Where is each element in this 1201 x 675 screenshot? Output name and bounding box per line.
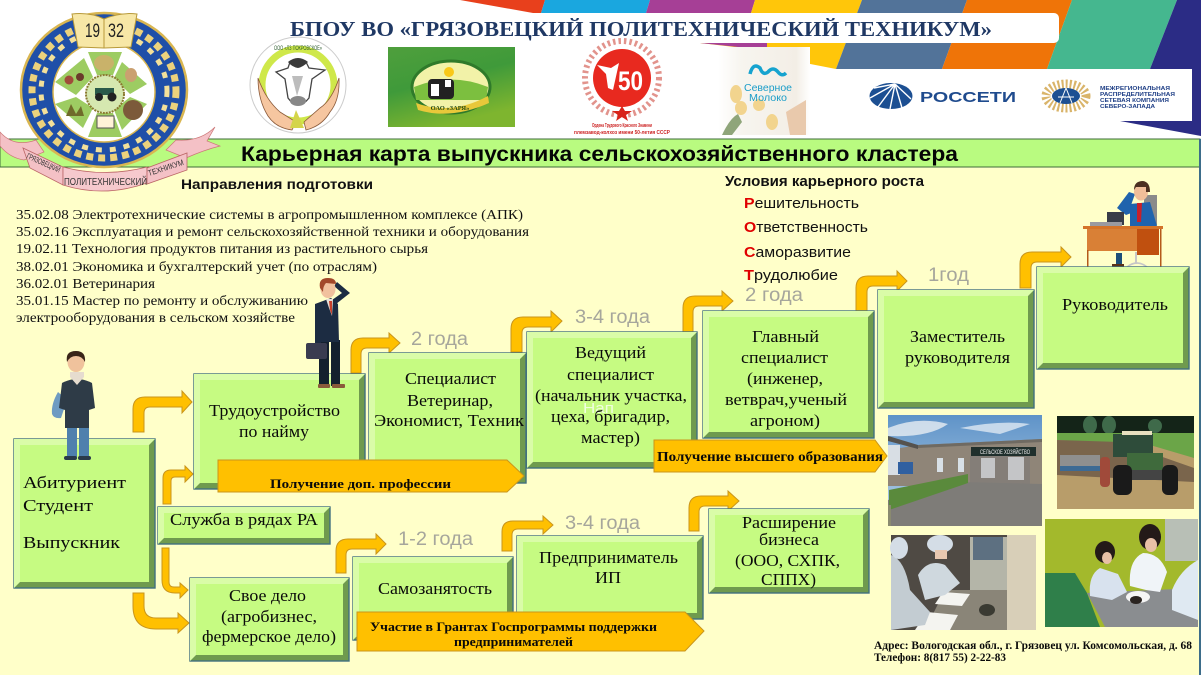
logo: Покровское cow: ООО «ЛЗ ПОКРОВСКОЕ»	[274, 46, 322, 52]
illustration: student	[52, 351, 95, 460]
text block: career growth conditions: Трудолюбие	[744, 268, 838, 284]
text block: training directions: 35.01.15 Мастер по ремонту и обслуживанию	[16, 293, 308, 308]
box: chief specialist: Главный	[752, 327, 819, 346]
logo: Северное Молоко: Молоко	[749, 92, 787, 104]
label: 3-4 years business: 3-4 года	[565, 513, 640, 534]
logo: college emblem: 19	[85, 21, 100, 42]
arrow: lead to chief specialist	[683, 291, 733, 332]
box: own business: (агробизнес,	[221, 607, 317, 626]
photo: college building	[888, 415, 1042, 526]
banner: higher education: Получение высшего образования	[657, 449, 883, 464]
arrow: self-employment to entrepreneur	[502, 516, 553, 551]
logo: МРСК Северо-Запада: СЕВЕРО-ЗАПАДА	[1100, 104, 1156, 110]
text block: training directions: Направления подготовки	[181, 176, 373, 192]
box: abiturient: Студент	[23, 496, 94, 515]
heading: college name: БПОУ ВО «ГРЯЗОВЕЦКИЙ ПОЛИТЕХНИЧЕСКИЙ ТЕХНИКУМ»	[290, 17, 992, 41]
arrow: army to employment	[163, 466, 193, 504]
photo: college building: СЕЛЬСКОЕ ХОЗЯЙСТВО	[980, 448, 1030, 456]
box: self-employment: Самозанятость	[378, 579, 492, 598]
box: chief specialist	[703, 311, 874, 438]
box: deputy head: Заместитель	[910, 327, 1005, 346]
box: own business: Свое дело	[229, 586, 306, 605]
arrow: entrepreneur to business expansion	[689, 491, 739, 531]
box: lead specialist: Ведущий	[575, 343, 646, 362]
logo: college emblem: ПОЛИТЕХНИЧЕСКИЙ	[64, 175, 147, 188]
logo: Россети: РОССЕТИ	[920, 89, 1016, 106]
box: abiturient: Абитуриент	[23, 473, 127, 492]
text block: career growth conditions: Ответственность	[744, 220, 868, 236]
text block: career growth conditions: Решительность	[744, 196, 859, 212]
box: entrepreneur: Предприниматель	[539, 548, 678, 567]
box: deputy head: руководителя	[905, 348, 1010, 367]
box: business expansion: СППХ)	[761, 570, 816, 589]
illustration: man with briefcase	[306, 278, 350, 388]
box: employment	[194, 374, 365, 489]
box: own business: фермерское дело)	[202, 627, 336, 646]
arrow: student to own business	[133, 593, 189, 633]
illustration: manager at desk	[1083, 181, 1163, 267]
banner: grants: Участие в Грантах Госпрограммы поддержки	[370, 620, 657, 634]
box: head	[1037, 267, 1189, 369]
label: 1-2 years: 1-2 года	[398, 529, 473, 550]
logo: Северное Молоко	[718, 47, 810, 135]
box: business expansion: Расширение	[742, 513, 836, 532]
box: abiturient: Выпускник	[23, 533, 121, 552]
title band: Карьерная карта выпускника сельскохозяйственного кластера	[241, 143, 958, 166]
text block: training directions: 35.02.16 Эксплуатация и ремонт сельскохозяйственной техники и оборудования	[16, 224, 529, 239]
box: specialist: Ветеринар,	[407, 391, 493, 410]
label: 2 years: 2 года	[411, 329, 468, 350]
text block: address and phone	[874, 640, 1192, 664]
arrow: employment to specialist	[351, 333, 400, 373]
box: head: Руководитель	[1062, 295, 1168, 314]
logo: college emblem: ГРЯЗОВЕЦКИЙ	[25, 152, 62, 175]
box: entrepreneur: ИП	[595, 568, 621, 587]
box: deputy head	[878, 290, 1034, 408]
logo: ОАО Заря: ОАО «ЗАРЯ»	[431, 105, 469, 112]
logo: Россети	[870, 83, 1016, 109]
text block: address and phone: Адрес: Вологодская обл., г. Грязовец ул. Комсомольская, д. 68	[874, 640, 1192, 652]
logo: 50 years	[574, 41, 671, 136]
label: 3-4 years: 3-4 года	[575, 307, 650, 328]
text block: address and phone: Телефон: 8(817 55) 2-22-83	[874, 652, 1006, 664]
logo: Северное Молоко: Северное	[744, 82, 792, 94]
box: specialist: Специалист	[405, 369, 497, 388]
logo: МРСК Северо-Запада: РАСПРЕДЕЛИТЕЛЬНАЯ	[1100, 92, 1175, 98]
arrow: student to employment	[133, 391, 192, 432]
logo: ОАО Заря	[388, 47, 515, 127]
banner: additional profession: Получение доп. профессии	[270, 476, 452, 491]
logo: college emblem	[0, 13, 220, 191]
banner: additional profession	[218, 460, 524, 492]
box: own business	[190, 578, 349, 661]
logo: 50 years: племзавод-колхоз имени 50-летия СССР	[574, 130, 671, 136]
box: lead specialist: цеха, бригадир,	[551, 407, 670, 426]
box: lead specialist: Нап	[583, 400, 614, 417]
photo: tractor in field	[1057, 416, 1194, 509]
photo: laboratory work	[890, 535, 1036, 630]
box: self-employment	[353, 557, 513, 640]
box: lead specialist: мастер)	[581, 428, 640, 447]
logo: МРСК Северо-Запада: МЕЖРЕГИОНАЛЬНАЯ	[1100, 86, 1170, 92]
box: specialist: Экономист, Техник	[374, 411, 525, 430]
box: lead specialist: специалист	[567, 365, 655, 384]
banner: higher education	[654, 440, 887, 472]
banner: grants: предпринимателей	[454, 635, 573, 649]
logo: college emblem: ТЕХНИКУМ	[147, 158, 185, 178]
box: army service	[158, 507, 330, 544]
text block: training directions: электрооборудования в сельском хозяйстве	[16, 310, 295, 325]
logo: 50 years: Ордена Трудового Красного Знамени	[592, 123, 652, 129]
title band	[0, 139, 1200, 167]
arrow: chief to deputy head	[856, 271, 907, 311]
box: employment: Трудоустройство	[209, 401, 340, 420]
logo: Покровское cow	[250, 37, 346, 133]
box: abiturient	[14, 439, 155, 588]
label: 1 year: 1год	[928, 265, 969, 286]
arrow: army to own business	[162, 548, 188, 598]
box: specialist	[369, 353, 526, 483]
box: entrepreneur	[517, 536, 703, 619]
text block: training directions: 19.02.11 Технология продуктов питания из растительного сырья	[16, 241, 428, 256]
box: lead specialist: (начальник участка,	[535, 386, 687, 405]
box: employment: по найму	[239, 422, 310, 441]
text block: career growth conditions: Условия карьерного роста	[725, 173, 925, 190]
box: business expansion	[709, 509, 869, 593]
text block: training directions: 35.02.08 Электротехнические системы в агропромышленном комплексе (АПК)	[16, 207, 523, 222]
text block: training directions: 36.02.01 Ветеринария	[16, 276, 155, 291]
arrow: specialist to lead specialist	[511, 311, 562, 352]
logo: МРСК Северо-Запада: СЕТЕВАЯ КОМПАНИЯ	[1100, 98, 1169, 104]
box: lead specialist	[527, 332, 697, 468]
arrow: own business to self-employment	[336, 534, 386, 573]
text block: career growth conditions: Саморазвитие	[744, 245, 851, 261]
box: army service: Служба в рядах РА	[170, 510, 319, 529]
logo: МРСК Северо-Запада	[1046, 84, 1175, 110]
box: chief specialist: (инженер,	[747, 369, 823, 388]
box: business expansion: бизнеса	[759, 530, 819, 549]
logo: 50 years: 50	[618, 66, 643, 96]
text block: career growth conditions	[725, 173, 925, 284]
box: chief specialist: ветврач,ученый	[725, 390, 847, 409]
logo: college emblem: 32	[108, 21, 124, 42]
header colour stripes	[460, 0, 1201, 136]
box: chief specialist: агроном)	[750, 411, 820, 430]
photo: veterinary students	[1045, 519, 1198, 627]
arrow: deputy to head	[1020, 247, 1071, 288]
box: business expansion: (ООО, СХПК,	[735, 551, 840, 570]
banner: grants	[357, 612, 704, 651]
label: 2 years chief: 2 года	[745, 285, 803, 306]
text block: training directions: 38.02.01 Экономика и бухгалтерский учет (по отраслям)	[16, 259, 377, 274]
text block: training directions	[16, 176, 529, 325]
box: chief specialist: специалист	[741, 348, 829, 367]
